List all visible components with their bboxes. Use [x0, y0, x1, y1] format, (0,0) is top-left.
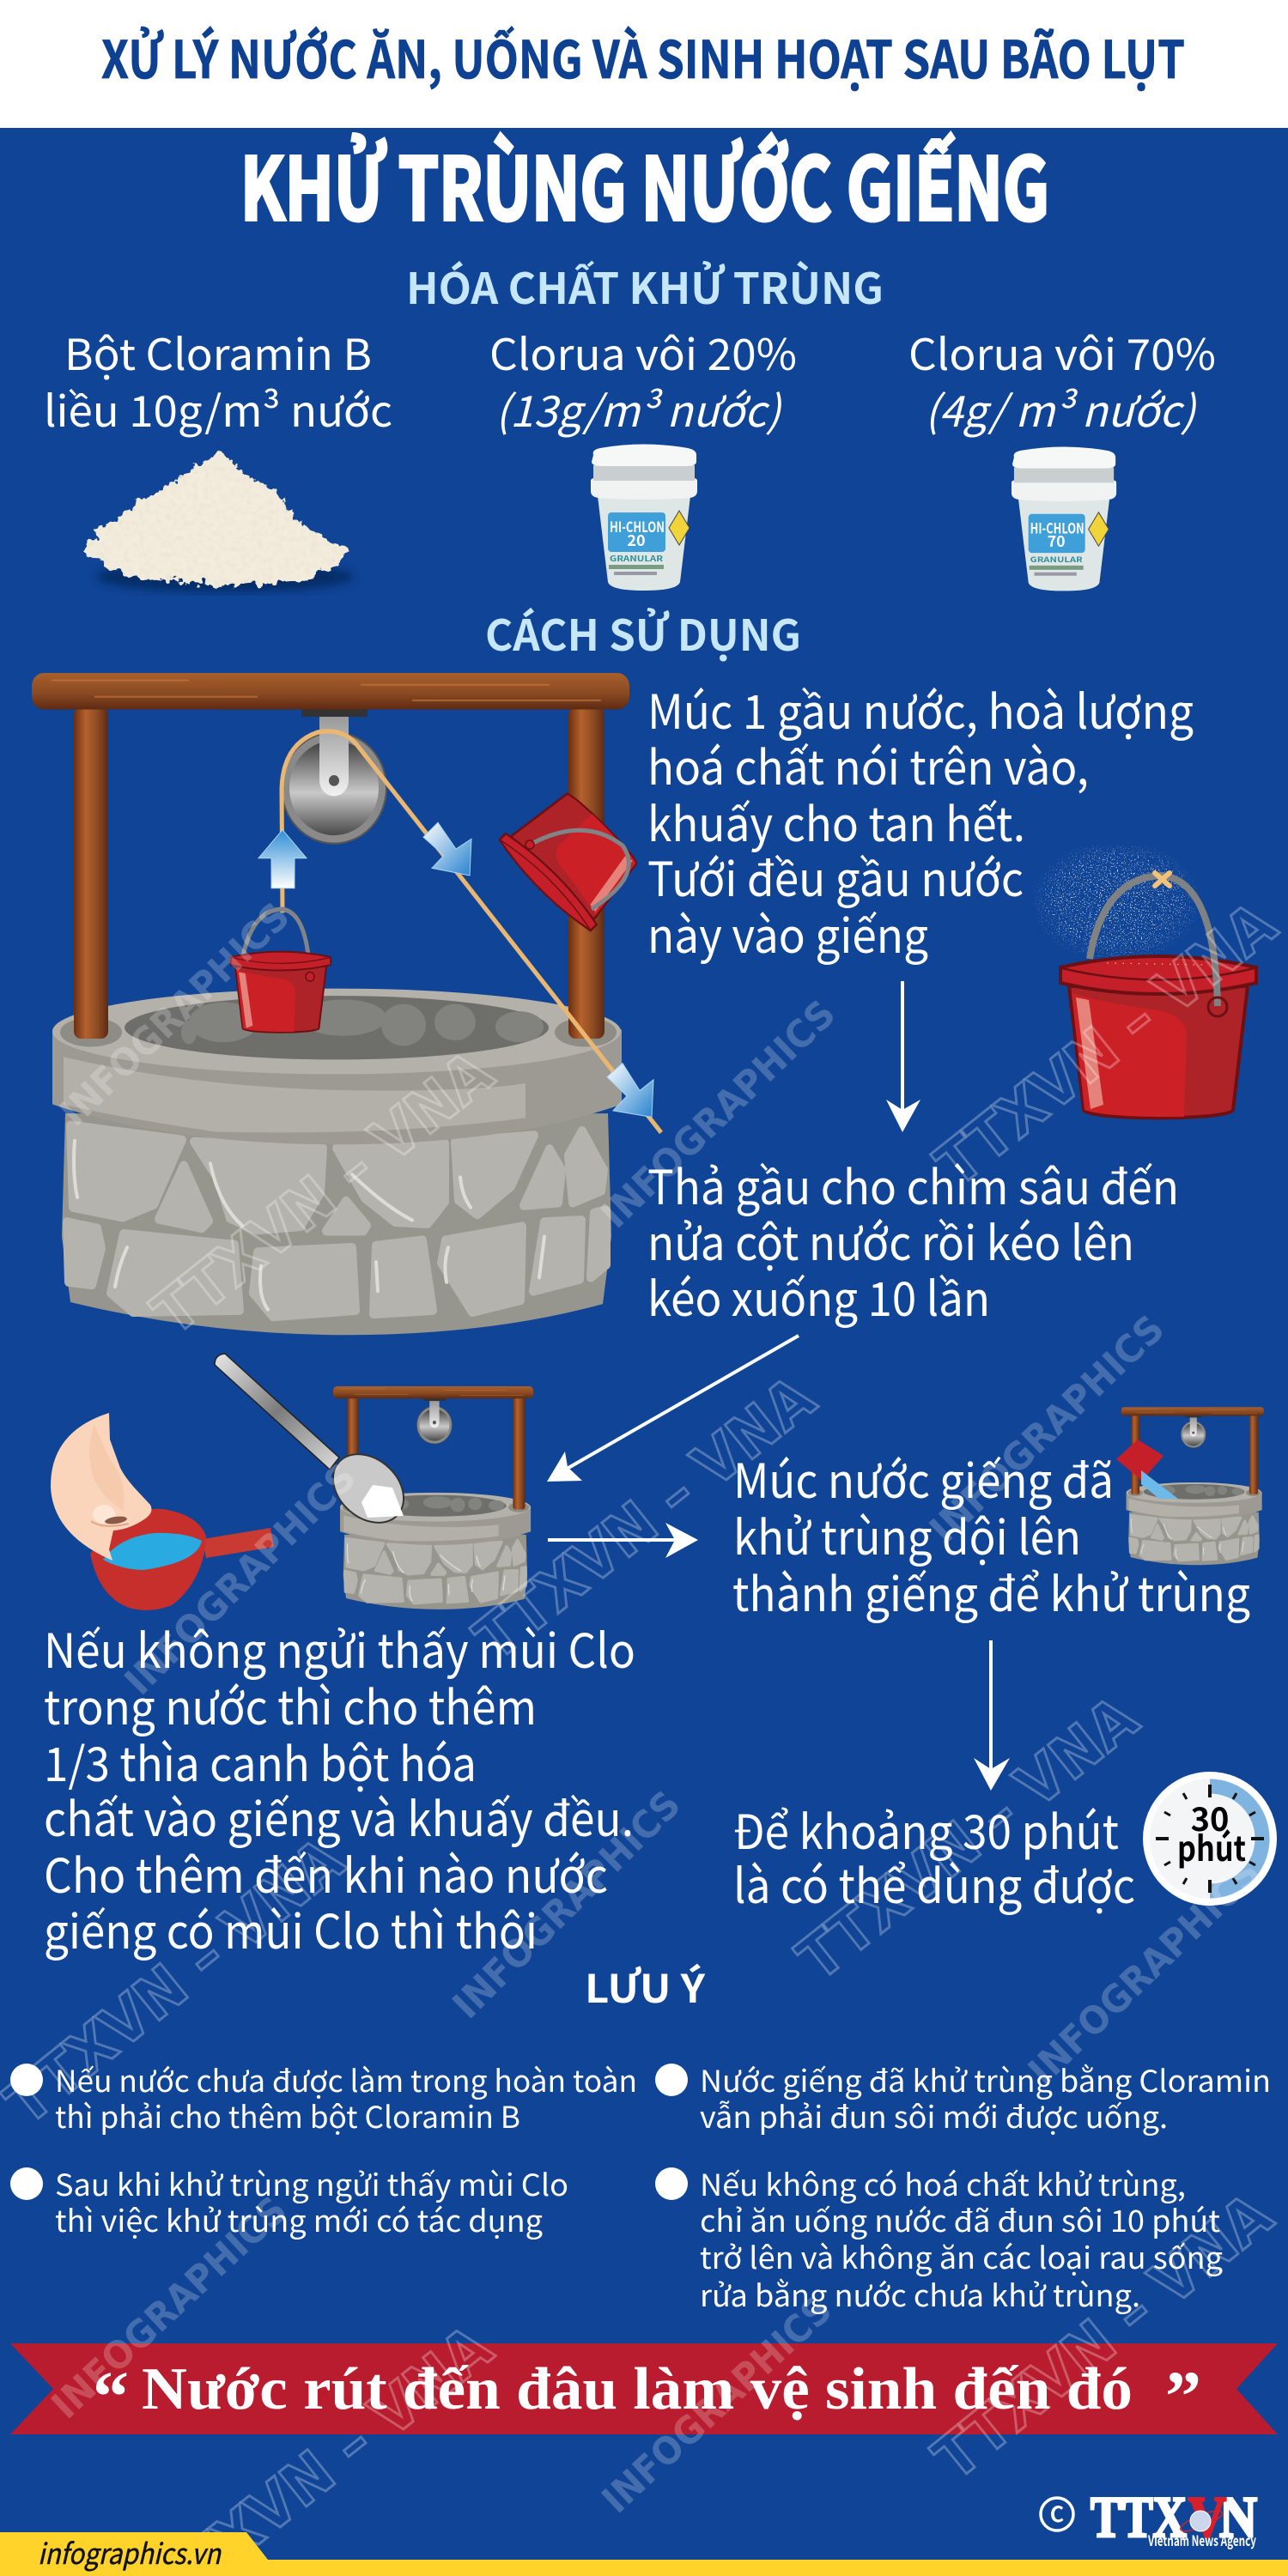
chemical 2 label: [489, 321, 797, 439]
step 3 text: Cho thêm đến khi nào nước: [44, 1838, 608, 1906]
step 4 text: [732, 1443, 1250, 1625]
slogan ribbon: “: [93, 2357, 129, 2437]
note 3: vẫn phải đun sôi mới được uống.: [700, 2094, 1168, 2137]
rope: [282, 731, 661, 1132]
icon: bottle Hi-Chlon 70: HI-CHLON: [1030, 517, 1084, 537]
icon: powder pile: [82, 453, 354, 592]
step 3 text: 1/3 thìa canh bột hóa: [44, 1726, 477, 1795]
watermarks: INFOGRAPHICS: [44, 2188, 295, 2428]
footer website tab: infographics.vn: [38, 2531, 222, 2573]
step 5 text: Để khoảng 30 phút: [733, 1794, 1119, 1863]
step 5 text: là có thể dùng được: [733, 1848, 1135, 1917]
step 2 text: nửa cột nước rồi kéo lên: [647, 1205, 1134, 1274]
heading: notes: LƯU Ý: [585, 1958, 706, 2014]
icon: tilted bucket: [495, 780, 650, 935]
step 3 text: trong nước thì cho thêm: [44, 1670, 537, 1738]
arrow: rope down 2: [607, 1064, 653, 1117]
note 4: chỉ ăn uống nước đã đun sôi 10 phút: [700, 2197, 1220, 2241]
note 1: [10, 2058, 637, 2137]
chemical 3 label: [908, 321, 1216, 439]
step 2 text: [647, 1149, 1179, 1330]
slogan ribbon: ”: [1165, 2357, 1201, 2437]
step 4 text: khử trùng dội lên: [733, 1500, 1081, 1568]
heading: usage: CÁCH SỬ DỤNG: [485, 602, 801, 664]
slogan ribbon: [10, 2343, 1278, 2437]
note 1: thì phải cho thêm bột Cloramin B: [55, 2094, 520, 2137]
arrow: down to step 5: [974, 1640, 1010, 1791]
icon: spoon with powder: [215, 1354, 417, 1537]
icon: bottle Hi-Chlon 20: [591, 445, 697, 591]
footer website tab: [0, 2531, 1288, 2576]
note 4: rửa bằng nước chưa khử trùng.: [700, 2272, 1140, 2316]
step 5 text: [733, 1794, 1135, 1917]
watermarks: [0, 888, 1288, 2576]
watermarks: INFOGRAPHICS: [1020, 1851, 1269, 2094]
watermarks: TTXVN – VNA: [140, 1037, 506, 1349]
watermarks: INFOGRAPHICS: [594, 2288, 841, 2522]
step 3 text: chất vào giếng và khuấy đều.: [44, 1781, 634, 1850]
chemical 3 label: (4g/ m³ nước): [925, 378, 1197, 439]
step 1 text: Múc 1 gầu nước, hoà lượng: [647, 674, 1194, 742]
chemical 2 label: (13g/m³ nước): [495, 378, 782, 439]
watermarks: INFOGRAPHICS: [445, 1783, 690, 2027]
step 1 text: khuấy cho tan hết.: [647, 786, 1025, 855]
step 1 text: này vào giếng: [647, 898, 928, 967]
note 4: Nếu không có hoá chất khử trùng,: [700, 2161, 1186, 2205]
icon: ladle with water: [90, 1509, 274, 1610]
chemical 3 label: Clorua vôi 70%: [908, 321, 1216, 383]
icon: bottle Hi-Chlon 70: [1012, 446, 1116, 591]
watermarks: INFOGRAPHICS: [52, 894, 298, 1135]
icon: bottle Hi-Chlon 20: GRANULAR: [610, 553, 663, 564]
main title: KHỬ TRÙNG NƯỚC GIẾNG: [240, 120, 1049, 245]
watermarks: TTXVN – VNA: [462, 1362, 828, 1674]
logo TTXVN: TTX: [1091, 2484, 1187, 2549]
arrow: down to step 2: [886, 981, 920, 1132]
icon: small well: [333, 1386, 533, 1609]
note 2: thì việc khử trùng mới có tác dụng: [55, 2197, 543, 2241]
step 3 text: Nếu không ngửi thấy mùi Clo: [44, 1613, 635, 1682]
chemical 1 label: liều 10g/m³ nước: [44, 378, 392, 439]
logo TTXVN: V: [1188, 2484, 1226, 2549]
note 4: trở lên và không ăn các loại rau sống: [700, 2234, 1223, 2278]
arrow: up: [258, 830, 307, 888]
header band: [0, 0, 1288, 128]
arrow: to right: [548, 1523, 698, 1558]
heading: chemicals: HÓA CHẤT KHỬ TRÙNG: [406, 255, 884, 317]
watermarks: INFOGRAPHICS: [117, 1456, 365, 1704]
arrow: rope down 1: [423, 822, 471, 876]
icon: 30 minute clock: 30: [1191, 1793, 1229, 1840]
chemical 2 label: Clorua vôi 20%: [489, 321, 797, 383]
chemical 1 label: Bột Cloramin B: [64, 321, 372, 383]
note 3: Nước giếng đã khử trùng bằng Cloramin: [700, 2058, 1271, 2101]
step 2 text: Thả gầu cho chìm sâu đến: [647, 1149, 1179, 1218]
icon: 30 minute clock: phút: [1177, 1821, 1246, 1871]
chemical 1 label: [44, 321, 392, 439]
watermarks: INFOGRAPHICS: [921, 1307, 1173, 1552]
note 2: Sau khi khử trùng ngửi thấy mùi Clo: [55, 2161, 568, 2205]
step 2 text: kéo xuống 10 lần: [647, 1261, 990, 1330]
illustration: big well with pulley and hanging bucket: [32, 673, 661, 1335]
icon: bottle Hi-Chlon 70: 70: [1048, 530, 1066, 552]
step 1 text: Tưới đều gầu nước: [647, 841, 1024, 910]
logo TTXVN: [1041, 2484, 1257, 2550]
arrow: diagonal to small well: [547, 1336, 799, 1482]
watermarks: TTXVN – VNA: [0, 1824, 357, 2138]
watermarks: TTXVN – VNA: [785, 1682, 1151, 1994]
logo TTXVN: C: [1050, 2498, 1064, 2529]
icon: bottle Hi-Chlon 70: GRANULAR: [1030, 554, 1083, 565]
note 3: [655, 2058, 1271, 2137]
note 1: Nếu nước chưa được làm trong hoàn toàn: [55, 2058, 637, 2101]
icon: hanging bucket: [231, 909, 331, 1033]
icon: bucket with sprinkled powder: [1035, 846, 1256, 1118]
note 2: [10, 2161, 568, 2241]
icon: well with water being poured: [1116, 1407, 1264, 1565]
step 1 text: hoá chất nói trên vào,: [647, 730, 1089, 798]
step 4 text: Múc nước giếng đã: [733, 1443, 1114, 1512]
step 4 text: thành giếng để khử trùng: [732, 1556, 1250, 1625]
slogan ribbon: Nước rút đến đâu làm vệ sinh đến đó: [142, 2356, 1133, 2422]
step 3 text: giếng có mùi Clo thì thôi: [44, 1894, 538, 1962]
watermarks: INFOGRAPHICS: [592, 992, 844, 1237]
icon: bottle Hi-Chlon 20: 20: [627, 529, 646, 551]
step 3 text: [44, 1613, 635, 1962]
logo TTXVN: N: [1219, 2484, 1257, 2549]
icon: nose: [51, 1413, 151, 1561]
step 1 text: [647, 674, 1194, 967]
icon: bottle Hi-Chlon 20: HI-CHLON: [610, 515, 665, 536]
icon: 30 minute clock: [1143, 1772, 1277, 1906]
note 4: [655, 2161, 1223, 2316]
